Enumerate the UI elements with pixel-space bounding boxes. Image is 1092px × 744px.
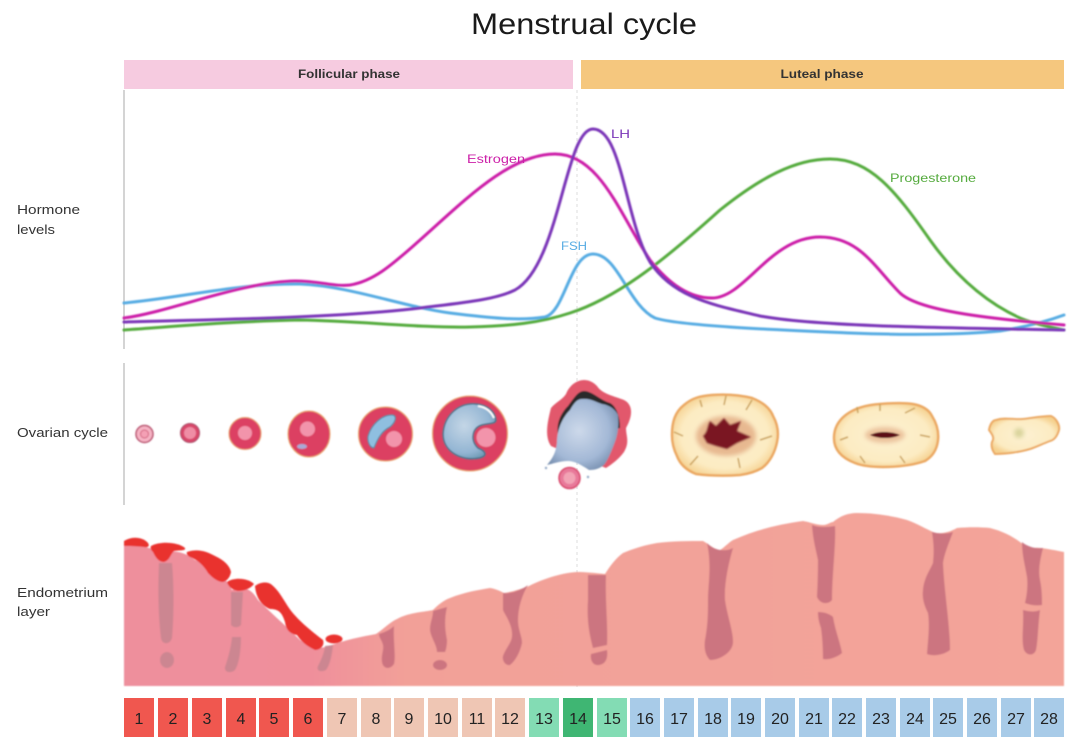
fertile days 13-15: [529, 698, 627, 737]
panel: luteal phase header: [581, 60, 1064, 89]
label: FSH: FSH: [561, 239, 587, 253]
day numbers: 21: [805, 711, 823, 728]
endometrial glands: [158, 525, 1043, 672]
day numbers: 3: [203, 711, 212, 728]
axis: hormone panel: [123, 90, 125, 349]
panel: luteal phase header: Luteal phase: [780, 67, 864, 81]
curve: progesterone: [124, 159, 1064, 330]
icon: mature follicle: [432, 396, 508, 471]
follicular days 7-12: [327, 698, 525, 737]
icon: corpus luteum medium: [834, 403, 938, 467]
day numbers: 26: [973, 711, 991, 728]
day numbers: 20: [771, 711, 789, 728]
day numbers: 5: [270, 711, 279, 728]
icon: primary follicle: [180, 424, 200, 442]
label: hormone levels: Hormone: [17, 202, 80, 217]
day numbers: 17: [670, 711, 688, 728]
day timeline: [124, 698, 1064, 737]
day numbers: 19: [737, 711, 755, 728]
label: endometrium layer: Endometrium: [17, 585, 108, 600]
day numbers: 13: [535, 711, 553, 728]
label: hormone levels: levels: [17, 222, 56, 237]
day numbers: 1: [135, 711, 144, 728]
day numbers: 8: [372, 711, 381, 728]
curve: LH: [124, 129, 1064, 330]
panel: follicular phase header: Follicular phase: [298, 67, 400, 81]
day numbers: 14: [569, 711, 587, 728]
day numbers: 2: [169, 711, 178, 728]
day numbers: 28: [1040, 711, 1058, 728]
day numbers: 16: [636, 711, 654, 728]
day numbers: [135, 711, 1058, 728]
axis: ovarian panel: [123, 363, 125, 505]
icon: secondary follicle: [229, 418, 261, 450]
day numbers: 22: [838, 711, 856, 728]
menstruation days 1-6: [124, 698, 323, 737]
day numbers: 9: [405, 711, 414, 728]
menstrual blood: [124, 538, 342, 650]
ovulation guide line: [576, 90, 578, 690]
label: estrogen: Estrogen: [467, 152, 525, 166]
day numbers: 6: [304, 711, 313, 728]
day numbers: 27: [1007, 711, 1025, 728]
label: endometrium layer: layer: [17, 604, 51, 619]
curve: FSH: [124, 254, 1064, 334]
ovarian cycle row: [136, 380, 1059, 488]
endometrium layer: [124, 513, 1064, 686]
icon: antral follicle: [358, 407, 412, 461]
endometrium tissue: [124, 513, 1064, 686]
label: ovarian cycle: Ovarian cycle: [17, 425, 108, 440]
icon: corpus luteum large: [672, 395, 778, 476]
day numbers: 4: [237, 711, 246, 728]
icon: early antral follicle: [288, 411, 330, 457]
title: Menstrual cycle: [471, 8, 697, 41]
icon: corpus albicans: [989, 416, 1059, 454]
day numbers: 12: [501, 711, 519, 728]
day numbers: 25: [939, 711, 957, 728]
chart: hormone levels: [124, 129, 1064, 334]
luteal days 16-28: [630, 698, 1064, 737]
day numbers: 10: [434, 711, 452, 728]
day numbers: 11: [469, 711, 485, 728]
icon: ovulation: [545, 380, 631, 488]
curve: estrogen: [124, 154, 1064, 325]
day numbers: 23: [872, 711, 890, 728]
icon: primordial follicle: [136, 426, 153, 442]
day numbers: 15: [603, 711, 621, 728]
day numbers: 24: [906, 711, 924, 728]
day numbers: 7: [338, 711, 347, 728]
label: progesterone: Progesterone: [890, 171, 976, 185]
panel: follicular phase header: [124, 60, 573, 89]
day numbers: 18: [704, 711, 722, 728]
label: LH: LH: [611, 127, 630, 141]
